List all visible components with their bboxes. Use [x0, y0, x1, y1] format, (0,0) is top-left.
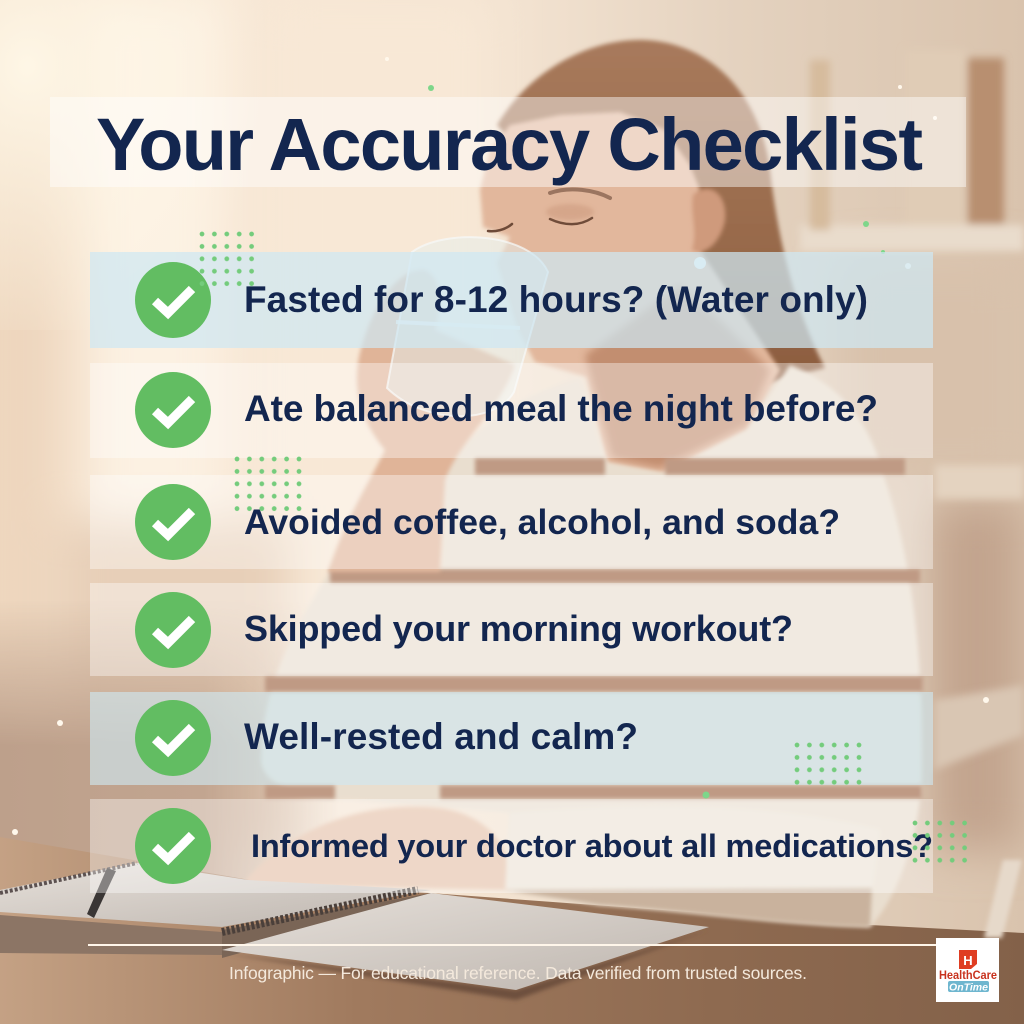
right page [222, 893, 709, 990]
forearm and hand holding glass [328, 270, 515, 572]
pen [87, 868, 116, 918]
row 3 [90, 475, 933, 569]
logo badge [948, 981, 989, 992]
dot pattern row 3 [233, 455, 305, 515]
logo wordmark: HealthCare [939, 970, 997, 982]
row 1 [90, 252, 933, 348]
earring [694, 257, 706, 269]
row 4 [90, 583, 933, 676]
shelf and books [800, 50, 1024, 499]
eyelid shading [546, 204, 594, 220]
footer rule [88, 944, 936, 946]
title banner [50, 97, 966, 187]
dot pattern row 1 [198, 230, 258, 290]
chair back [934, 685, 1024, 770]
sunlight flare [0, 0, 270, 330]
row 6: Informed your doctor about all medications? [251, 827, 933, 864]
row 5: Well-rested and calm? [244, 716, 638, 757]
row 3: Avoided coffee, alcohol, and soda? [244, 502, 840, 542]
glass of water [387, 237, 548, 416]
logo: HealthCare OnTime: OnTime [949, 982, 988, 994]
row 5 [90, 692, 933, 785]
footer note: Infographic — For educational reference. Data verified from trusted sources. [229, 963, 807, 983]
row 1: Fasted for 8-12 hours? (Water only) [244, 279, 868, 320]
row 6 [90, 799, 933, 893]
dot pattern row 6 [911, 819, 971, 867]
left page [0, 863, 431, 927]
notebook [0, 863, 709, 1000]
row 2: Ate balanced meal the night before? [244, 388, 878, 429]
row 2 [90, 363, 933, 458]
cuff [505, 807, 880, 890]
ear [692, 189, 725, 252]
table [0, 837, 1024, 1024]
top spiral [0, 863, 137, 893]
hand on notebook [242, 807, 511, 890]
logo: HealthCare OnTime: H [963, 953, 973, 968]
title text: Your Accuracy Checklist [96, 103, 923, 186]
sweater [261, 365, 922, 927]
spiral [222, 890, 418, 932]
hair [497, 40, 825, 400]
row 4: Skipped your morning workout? [244, 608, 793, 649]
water surface [396, 322, 520, 328]
sweater stripes [265, 458, 923, 799]
face and neck [480, 112, 780, 473]
light sparkles [12, 57, 989, 835]
lower left wall [0, 620, 312, 880]
logo: HealthCare OnTime [936, 938, 999, 1002]
logo icon [959, 950, 977, 969]
green sparkles [428, 85, 885, 798]
eyebrows and closed eyes [488, 189, 610, 231]
neck shadow [585, 285, 770, 468]
chair leg [984, 860, 1022, 938]
lower sleeve shade [505, 888, 872, 927]
checklist [90, 252, 933, 893]
dot pattern row 5 [793, 741, 865, 789]
